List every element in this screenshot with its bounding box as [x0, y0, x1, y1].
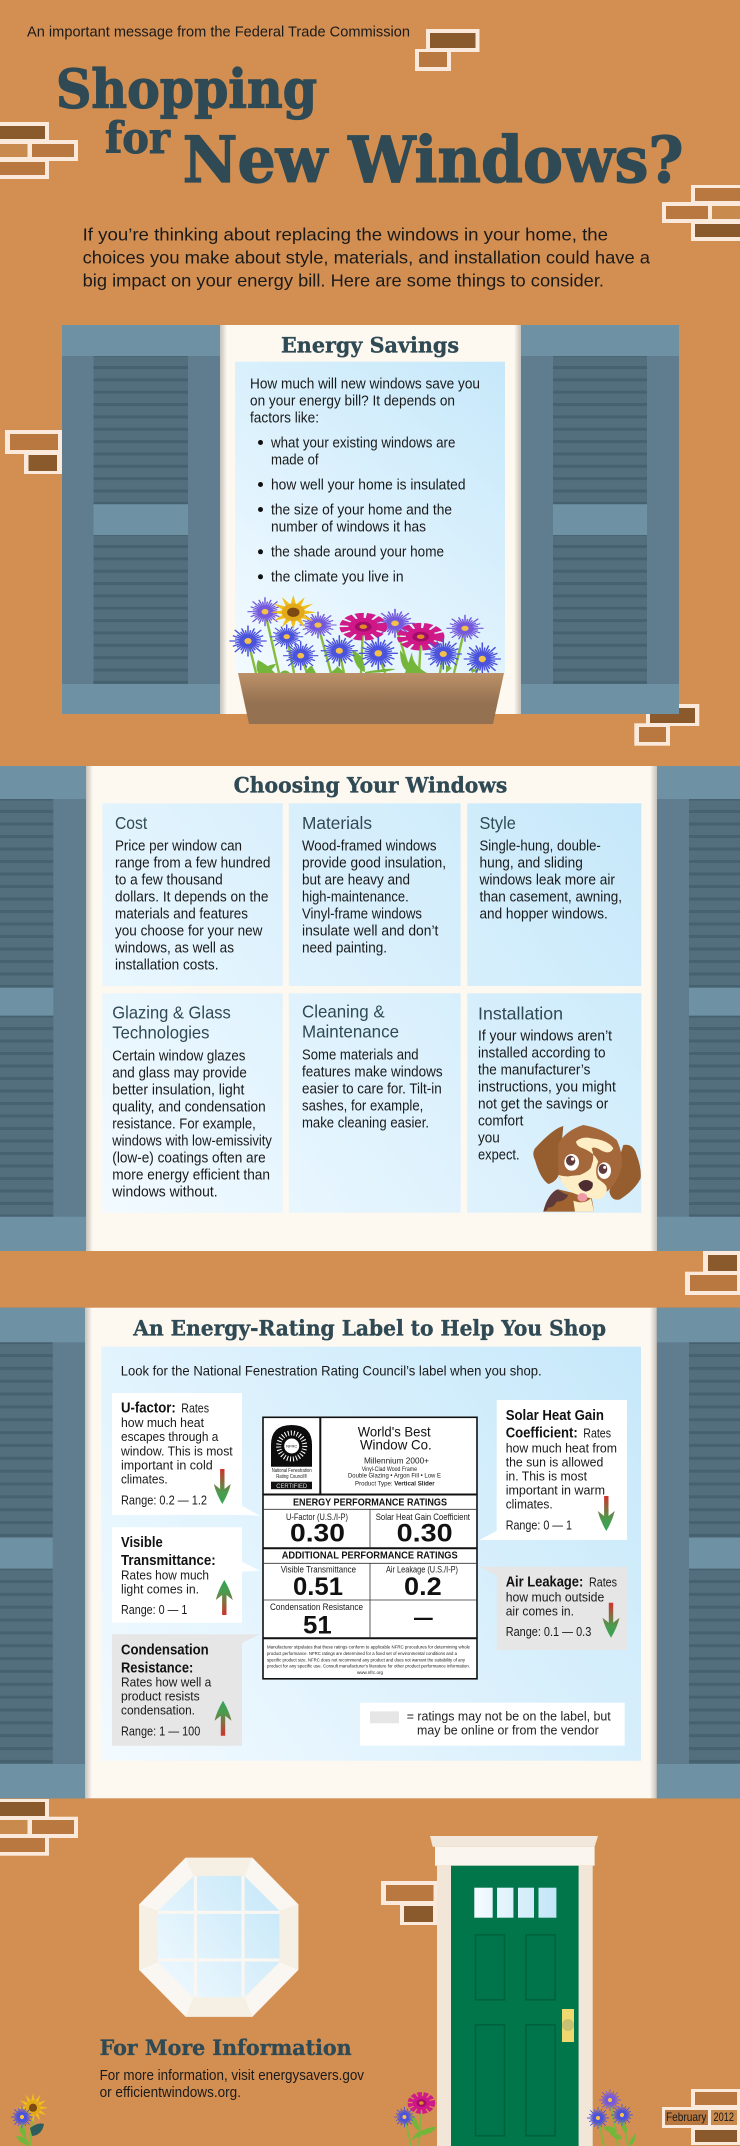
card: cost — [102, 803, 283, 986]
ratings: Solar Heat Gain Coefficient — [376, 1512, 470, 1522]
left shutter — [0, 766, 86, 1251]
blue background panel — [101, 1347, 641, 1761]
ratings: 0.51 — [293, 1573, 343, 1601]
callout: solar heat gain coefficient: climates. — [506, 1498, 553, 1512]
intro paragraph: choices you make about style, materials, and installation could have a — [83, 248, 650, 268]
callout: solar heat gain coefficient: in. This is most — [506, 1470, 587, 1484]
card: glazing and glass technologies: better insulation, light — [112, 1083, 244, 1099]
callout: air leakage: Air Leakage: — [506, 1575, 583, 1591]
card: materials: Materials — [302, 813, 372, 833]
callout: condensation resistance: Condensation — [121, 1642, 209, 1658]
flower box — [230, 595, 504, 724]
arrow: lower is better — [214, 1469, 231, 1504]
ratings: Air Leakage (U.S./I-P) — [386, 1564, 458, 1574]
NFRC logo: NFRC — [286, 1444, 297, 1448]
NFRC logo: Rating Council® — [276, 1473, 307, 1480]
savings factor list: the climate you live in — [271, 570, 404, 586]
card: installation: instructions, you might — [478, 1080, 616, 1096]
ratings: U-Factor (U.S./I-P) — [286, 1512, 348, 1522]
card: materials: Wood-framed windows — [302, 839, 436, 855]
card: materials: need painting. — [302, 941, 387, 957]
card: glazing and glass technologies: Certain window glazes — [112, 1049, 245, 1065]
fine print: product for any specific use. Consult manufacturer's literature for other product performance information. — [267, 1664, 470, 1668]
bricks: left of first window — [5, 430, 62, 474]
card: installation: you — [478, 1131, 500, 1147]
callout: solar heat gain coefficient: the sun is allowed — [506, 1456, 603, 1470]
card: cost: Price per window can — [115, 839, 242, 855]
ratings: Visible Transmittance — [281, 1564, 356, 1574]
callout: solar heat gain coefficient: Solar Heat Gain — [506, 1408, 604, 1424]
fine print: www.nfrc.org — [357, 1670, 383, 1675]
heading: energy-rating label: An Energy-Rating Label to Help You Shop — [132, 1316, 606, 1341]
savings factor list: the shade around your home — [271, 545, 444, 561]
NFRC logo: National Fenestration — [272, 1468, 312, 1474]
NFRC sample label — [263, 1417, 477, 1679]
icon: puppy — [533, 1125, 641, 1212]
savings intro text — [250, 376, 480, 427]
card: cost: you choose for your new — [115, 924, 263, 940]
card: cleaning and maintenance — [289, 993, 461, 1213]
ratings: — — [414, 1605, 433, 1630]
callout: air leakage: Range: 0.1 — 0.3 — [506, 1625, 591, 1639]
callout: solar heat gain coefficient: Range: 0 — 1 — [506, 1518, 572, 1532]
savings factor list: how well your home is insulated — [271, 477, 466, 493]
date: 2012 — [714, 2110, 734, 2124]
callout: U-factor: U-factor: — [121, 1401, 176, 1417]
card: glazing and glass technologies: windows without. — [111, 1185, 218, 1201]
callout: U-factor: window. This is most — [120, 1444, 233, 1458]
right shutter — [657, 1308, 740, 1798]
NFRC lead-in text: Look for the National Fenestration Rating Council’s label when you shop. — [121, 1362, 542, 1378]
callout: solar heat gain coefficient: Coefficient: — [506, 1426, 578, 1442]
card: cleaning and maintenance: make cleaning easier. — [302, 1115, 429, 1131]
bricks: right between sections — [685, 1251, 740, 1295]
savings factor list: what your existing windows are — [270, 435, 455, 451]
card: materials — [289, 803, 461, 986]
manufacturer block: Millennium 2000+ — [364, 1456, 429, 1465]
green front door — [430, 1836, 598, 2146]
manufacturer block — [348, 1424, 441, 1488]
manufacturer block: Vinyl-Clad Wood Frame — [362, 1467, 418, 1473]
callout: condensation resistance: product resists — [121, 1690, 200, 1704]
legend: grey ratings note — [360, 1703, 625, 1746]
ratings: ENERGY PERFORMANCE RATINGS — [293, 1498, 447, 1509]
savings intro text: on your energy bill? It depends on — [250, 394, 455, 410]
card: installation: installed according to — [478, 1046, 606, 1062]
callout: condensation resistance: Resistance: — [121, 1660, 193, 1676]
callout: solar heat gain coefficient: Rates — [583, 1427, 611, 1441]
card: cost: dollars. It depends on the — [115, 890, 268, 906]
savings factor list: made of — [271, 452, 319, 468]
intro paragraph: If you’re thinking about replacing the windows in your home, the — [83, 225, 608, 245]
callout: U-factor: climates. — [121, 1472, 168, 1486]
savings factor list — [258, 435, 466, 586]
callout: U-factor: Range: 0.2 — 1.2 — [121, 1493, 207, 1507]
card: cost: range from a few hundred — [115, 856, 270, 872]
savings factor list: number of windows it has — [271, 520, 426, 536]
bricks with date — [662, 2089, 740, 2145]
card: installation: not get the savings or — [478, 1097, 608, 1113]
title: New Windows? — [183, 123, 684, 198]
card: cost: to a few thousand — [115, 873, 223, 889]
bricks: left of title — [0, 122, 78, 179]
fine print: product performance. NFRC ratings are determined for a fixed set of environmental conditions and a — [267, 1651, 457, 1656]
card: materials: high-maintenance. — [302, 890, 409, 906]
callout: solar heat gain coefficient: how much heat from — [506, 1441, 617, 1455]
more information text: or efficientwindows.org. — [100, 2085, 241, 2101]
NFRC logo: CERTIFIED — [276, 1484, 308, 1490]
callout: visible transmittance — [112, 1527, 260, 1623]
callout: visible transmittance: Visible — [121, 1535, 163, 1551]
ratings — [270, 1498, 470, 1639]
brick beside door — [381, 1881, 437, 1925]
right shutter — [657, 766, 740, 1251]
bricks: right of title — [662, 185, 740, 241]
arrow: lower is better — [602, 1603, 620, 1638]
card: cleaning and maintenance: sashes, for example, — [302, 1098, 423, 1114]
left shutter — [62, 325, 220, 714]
callout: U-factor: escapes through a — [121, 1430, 218, 1444]
ratings: Condensation Resistance — [270, 1602, 363, 1612]
window opening — [86, 766, 657, 1251]
manufacturer block: Window Co. — [360, 1436, 432, 1452]
callout: U-factor — [112, 1393, 260, 1516]
window opening — [85, 1308, 657, 1798]
callout: visible transmittance: Range: 0 — 1 — [121, 1603, 187, 1617]
door lights — [474, 1888, 556, 1918]
manufacturer block: Product Type: Vertical Slider — [355, 1482, 435, 1488]
panel: energy-rating label — [0, 1308, 740, 1798]
card: glazing and glass technologies: Glazing & Glass — [112, 1002, 231, 1022]
ratings: 0.30 — [290, 1520, 345, 1548]
card: cleaning and maintenance: features make windows — [302, 1064, 443, 1080]
card: cost: Cost — [115, 813, 147, 833]
heading: for more information: For More Information — [100, 2036, 352, 2061]
card: style — [467, 803, 641, 986]
callout: condensation resistance: Rates how well a — [121, 1676, 211, 1690]
card: cleaning and maintenance: Some materials and — [302, 1047, 419, 1063]
card: style: than casement, awning, — [480, 890, 622, 906]
card: installation — [467, 993, 641, 1213]
panel: energy savings window — [62, 325, 679, 724]
card: cleaning and maintenance: Maintenance — [302, 1022, 399, 1042]
door panels — [476, 1935, 555, 2136]
arrow: lower is better — [598, 1496, 615, 1531]
NFRC logo — [271, 1425, 312, 1490]
left shutter — [0, 1308, 85, 1798]
card: style: Style — [480, 813, 516, 833]
callout: air leakage: Rates — [589, 1576, 617, 1590]
card: materials: but are heavy and — [302, 873, 410, 889]
card: installation: If your windows aren’t — [478, 1029, 612, 1045]
card: glazing and glass technologies: and glass may provide — [112, 1066, 247, 1082]
card: materials: Vinyl-frame windows — [302, 907, 422, 923]
callout: air leakage: air comes in. — [506, 1604, 574, 1618]
ratings: ADDITIONAL PERFORMANCE RATINGS — [282, 1550, 458, 1561]
blue text panel — [235, 362, 505, 673]
card: glazing and glass technologies: windows with low-emissivity — [111, 1134, 272, 1150]
message from the Federal Trade Commission: An important message from the Federal Trade Commission — [27, 25, 410, 41]
card: installation: comfort — [478, 1114, 523, 1130]
savings intro text: How much will new windows save you — [250, 376, 480, 392]
card: installation: expect. — [478, 1148, 520, 1164]
intro paragraph — [83, 225, 650, 291]
bricks: lower left — [0, 1799, 78, 1856]
title — [56, 59, 684, 198]
card: glazing and glass technologies: resistance. For example, — [112, 1117, 256, 1133]
card: style: windows leak more air — [479, 873, 615, 889]
bricks: right of first window — [634, 704, 699, 746]
date: February — [666, 2110, 706, 2124]
card: installation: Installation — [478, 1003, 563, 1023]
panel: choosing your windows — [0, 766, 740, 1251]
ratings: 0.2 — [404, 1573, 442, 1601]
callout: condensation resistance — [112, 1634, 260, 1746]
callout: visible transmittance: Rates how much — [121, 1568, 209, 1582]
savings factor list: the size of your home and the — [271, 502, 452, 518]
callout: solar heat gain coefficient: important in warm — [506, 1484, 605, 1498]
savings intro text: factors like: — [250, 411, 319, 427]
intro paragraph: big impact on your energy bill. Here are some things to consider. — [83, 271, 604, 291]
flowers: beside door, left — [394, 2095, 437, 2146]
title: Shopping — [56, 59, 317, 121]
title: for — [105, 114, 171, 164]
fine print: specific product size. NFRC does not recommend any product and does not warrant the suitability of any — [267, 1657, 466, 1662]
card: cost: windows, as well as — [114, 941, 234, 957]
callout: solar heat gain coefficient — [479, 1400, 627, 1540]
callout: U-factor: Rates — [181, 1402, 209, 1416]
ratings: 0.30 — [397, 1520, 453, 1548]
callout: condensation resistance: condensation. — [121, 1704, 195, 1718]
right shutter — [521, 325, 679, 714]
card: style: and hopper windows. — [480, 907, 608, 923]
manufacturer block: Double Glazing • Argon Fill • Low E — [348, 1474, 441, 1480]
heading: energy savings: Energy Savings — [281, 333, 459, 358]
fine print — [267, 1644, 470, 1675]
callout: visible transmittance: light comes in. — [121, 1582, 199, 1596]
more information text — [100, 2068, 365, 2101]
bricks: top — [415, 29, 480, 71]
card: glazing and glass technologies: more energy efficient than — [112, 1168, 270, 1184]
legend: grey ratings note: = ratings may not be on the label, but — [407, 1710, 611, 1724]
card: cost: installation costs. — [115, 958, 218, 974]
card: glazing and glass technologies: Technologies — [112, 1023, 210, 1043]
arrow: higher is better — [216, 1580, 233, 1615]
card: cost: materials and features — [115, 907, 248, 923]
card: materials: insulate well and don’t — [302, 924, 438, 940]
flowers: beside door, right — [588, 2090, 636, 2146]
door knob — [562, 2009, 574, 2042]
fine print: Manufacturer stipulates that these ratings conform to applicable NFRC procedures for determining whole — [267, 1644, 470, 1649]
window opening — [220, 325, 521, 714]
more information text: For more information, visit energysavers.gov — [100, 2068, 365, 2084]
heading: choosing your windows: Choosing Your Windows — [234, 773, 507, 798]
manufacturer block: World's Best — [358, 1424, 431, 1440]
flowers: bottom left — [12, 2093, 48, 2146]
callout: U-factor: how much heat — [121, 1416, 204, 1430]
card: glazing and glass technologies — [102, 993, 283, 1213]
callout: visible transmittance: Transmittance: — [121, 1553, 216, 1569]
octagonal window — [139, 1858, 298, 2017]
card: cleaning and maintenance: easier to care for. Tilt-in — [302, 1081, 442, 1097]
callout: air leakage — [480, 1567, 627, 1650]
arrow: higher is better — [214, 1701, 232, 1736]
callout: U-factor: important in cold — [121, 1458, 213, 1472]
card: style: Single-hung, double- — [480, 839, 601, 855]
legend: grey ratings note: may be online or from the vendor — [417, 1724, 599, 1738]
card: materials: provide good insulation, — [302, 856, 446, 872]
callout: air leakage: how much outside — [506, 1590, 604, 1604]
card: cleaning and maintenance: Cleaning & — [302, 1002, 385, 1022]
ratings: 51 — [303, 1611, 332, 1639]
card: installation: the manufacturer’s — [478, 1063, 590, 1079]
callout: condensation resistance: Range: 1 — 100 — [121, 1724, 200, 1738]
card: style: hung, and sliding — [480, 856, 583, 872]
card: glazing and glass technologies: quality, and condensation — [112, 1100, 266, 1116]
card: glazing and glass technologies: (low-e) coatings often are — [112, 1151, 266, 1167]
